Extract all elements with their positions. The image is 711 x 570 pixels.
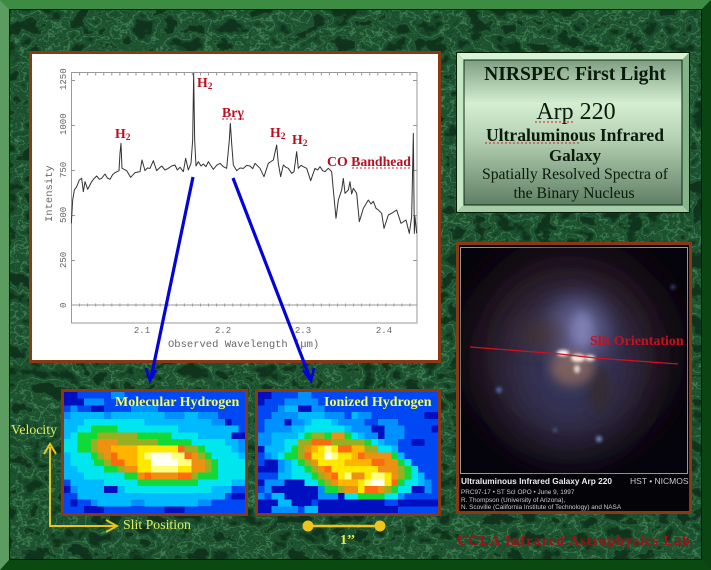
panel: spectrum chart [30, 52, 440, 362]
slit label: Slit Orientation [590, 334, 684, 349]
y axis labels: 500 [59, 207, 69, 223]
spectral line labels [115, 75, 412, 169]
y axis labels [44, 68, 69, 308]
heatmap title: Molecular Hydrogen [115, 395, 240, 410]
arrow: H2 line to molecular hydrogen map [146, 177, 193, 381]
spectral line labels: Brγ [222, 105, 244, 120]
y axis labels: 250 [59, 252, 69, 268]
image caption: N. Scoville (California Institute of Technology) and NASA [461, 504, 622, 511]
heatmap: ionized hydrogen [256, 390, 440, 514]
x axis labels: 2.1 [134, 326, 150, 336]
arrow: Br gamma line to ionized hydrogen map [233, 178, 314, 381]
velocity label: Velocity [11, 422, 57, 437]
title text: the Binary Nucleus [513, 185, 635, 202]
y axis labels: 750 [59, 162, 69, 178]
image caption: Ultraluminous Infrared Galaxy Arp 220 [461, 476, 612, 486]
image caption: R. Thompson (University of Arizona), [461, 497, 566, 504]
spectral line labels: H [115, 126, 126, 141]
title text: Arp 220 [536, 99, 616, 125]
galaxy glow [470, 250, 675, 450]
spectral line labels: H [270, 125, 281, 140]
spectral line labels: CO Bandhead [327, 154, 411, 169]
title text: Spatially Resolved Spectra of [482, 166, 669, 183]
spectral line labels: 2 [281, 132, 286, 142]
y axis labels: 1000 [59, 113, 69, 135]
x axis labels: 2.4 [376, 326, 392, 336]
axis arrows: velocity and slit position [44, 444, 117, 532]
panel: title box [456, 52, 690, 213]
lab credit: UCLA Infrared Astrophysics Lab [457, 534, 690, 549]
image caption [461, 476, 689, 511]
chart axes and ticks [71, 72, 417, 323]
x axis labels: 2.2 [215, 326, 231, 336]
title text: Galaxy [549, 146, 601, 165]
spectral line labels: H [197, 75, 208, 90]
scale bar: 1’’ [340, 533, 355, 548]
slit line [470, 347, 678, 364]
heatmap: molecular hydrogen [62, 390, 246, 514]
heatmap title: Ionized Hydrogen [324, 395, 432, 410]
spectral line labels: 2 [208, 82, 213, 92]
y axis labels: Intensity [44, 165, 56, 222]
spectral line labels: 2 [126, 133, 131, 143]
spectral line labels: H [292, 132, 303, 147]
slit position label: Slit Position [123, 517, 191, 532]
spectrum line [71, 73, 417, 233]
x axis labels [134, 326, 392, 351]
title text: Ultraluminous Infrared [486, 125, 664, 145]
scale bar [302, 520, 386, 548]
title text [482, 64, 669, 202]
y axis labels: 1250 [59, 68, 69, 90]
x axis labels: Observed Wavelength (μm) [168, 339, 319, 351]
panel: galaxy image [458, 244, 690, 512]
y axis labels: 0 [59, 303, 69, 308]
spectral line labels: 2 [303, 139, 308, 149]
image caption: PRC97-17 • ST ScI OPO • June 9, 1997 [461, 489, 575, 496]
title text: NIRSPEC First Light [484, 64, 666, 85]
image caption: HST • NICMOS [630, 476, 689, 486]
x axis labels: 2.3 [295, 326, 311, 336]
